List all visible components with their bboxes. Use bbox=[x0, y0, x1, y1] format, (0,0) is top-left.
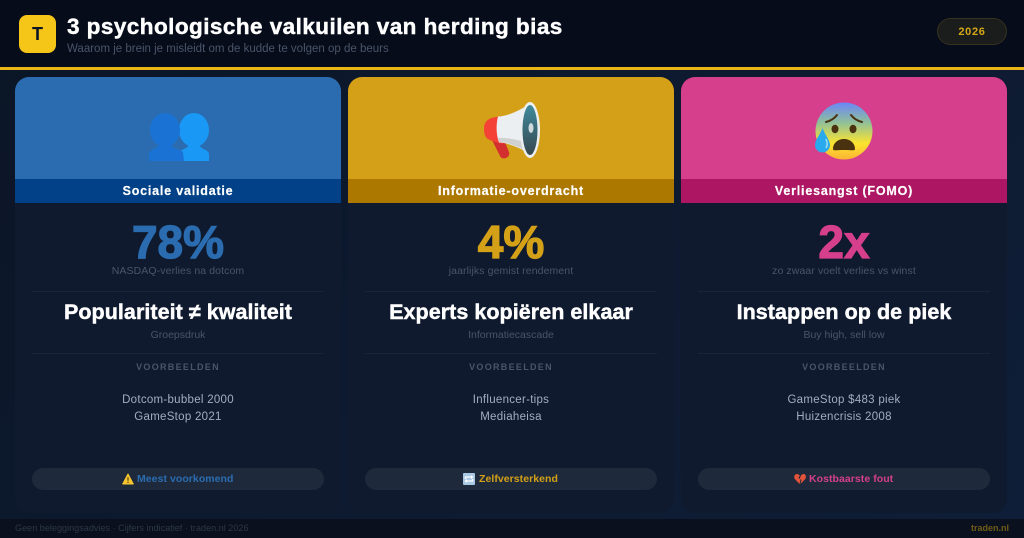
label bar: Verliesangst (FOMO) bbox=[775, 184, 913, 198]
examples label: VOORBEELDEN bbox=[469, 362, 553, 372]
examples list: Mediaheisa bbox=[480, 411, 542, 423]
heading caption: Informatiecascade bbox=[468, 329, 554, 341]
examples list: GameStop 2021 bbox=[134, 411, 222, 423]
examples list: Dotcom-bubbel 2000 bbox=[122, 394, 234, 406]
heading caption: Buy high, sell low bbox=[803, 329, 885, 341]
heading caption: Groepsdruk bbox=[151, 329, 205, 341]
icon: anxious face bbox=[815, 102, 872, 160]
header bar bbox=[0, 0, 1024, 70]
stat caption: zo zwaar voelt verlies vs winst bbox=[772, 265, 916, 277]
stat: 78% bbox=[132, 216, 224, 268]
disclaimer: Geen beleggingsadvies · Cijfers indicatief · traden.nl 2026 bbox=[15, 523, 249, 533]
heading: Experts kopiëren elkaar bbox=[389, 300, 633, 324]
icon: two people bbox=[149, 113, 209, 161]
examples label: VOORBEELDEN bbox=[136, 362, 220, 372]
year badge bbox=[937, 18, 1007, 45]
examples label: VOORBEELDEN bbox=[802, 362, 886, 372]
heading: Populariteit ≠ kwaliteit bbox=[64, 300, 292, 324]
panel: sociale validatie bbox=[15, 77, 341, 513]
hero block blue bbox=[15, 77, 341, 179]
stat caption: jaarlijks gemist rendement bbox=[449, 265, 573, 277]
footer bbox=[0, 519, 1024, 538]
icon: broken heart bbox=[794, 474, 806, 484]
tag pill bbox=[32, 468, 324, 490]
panel: informatie-overdracht bbox=[348, 77, 674, 513]
label bar bbox=[15, 179, 341, 203]
stat caption: NASDAQ-verlies na dotcom bbox=[112, 265, 244, 277]
examples list: Influencer-tips bbox=[473, 394, 549, 406]
tag text: Meest voorkomend bbox=[137, 473, 234, 485]
label bar: Informatie-overdracht bbox=[438, 184, 584, 198]
subtitle: Waarom je brein je misleidt om de kudde te volgen op de beurs bbox=[67, 43, 389, 55]
examples list bbox=[122, 394, 234, 423]
heading: Instappen op de piek bbox=[737, 300, 951, 324]
logo badge: T bbox=[32, 24, 43, 44]
stat: 2x bbox=[818, 216, 870, 268]
icon: repeat bbox=[463, 473, 475, 485]
tag text: Kostbaarste fout bbox=[809, 473, 893, 485]
label bar bbox=[348, 179, 674, 203]
icon: warning bbox=[122, 474, 134, 484]
stat: 4% bbox=[478, 216, 544, 268]
examples list bbox=[473, 394, 549, 423]
examples list: GameStop $483 piek bbox=[787, 394, 901, 406]
panel: verliesangst bbox=[681, 77, 1007, 513]
logo badge bbox=[19, 15, 56, 53]
examples list: Huizencrisis 2008 bbox=[796, 411, 892, 423]
icon: megaphone bbox=[484, 102, 540, 158]
label bar bbox=[681, 179, 1007, 203]
tag pill bbox=[698, 468, 990, 490]
year badge: 2026 bbox=[958, 26, 986, 38]
tag pill bbox=[365, 468, 657, 490]
tag text: Zelfversterkend bbox=[479, 473, 558, 485]
hero block pink bbox=[681, 77, 1007, 179]
hero block gold bbox=[348, 77, 674, 179]
brand: traden.nl bbox=[971, 523, 1009, 533]
examples list bbox=[787, 394, 901, 423]
title: 3 psychologische valkuilen van herding bias bbox=[67, 14, 563, 39]
label bar: Sociale validatie bbox=[123, 184, 233, 198]
